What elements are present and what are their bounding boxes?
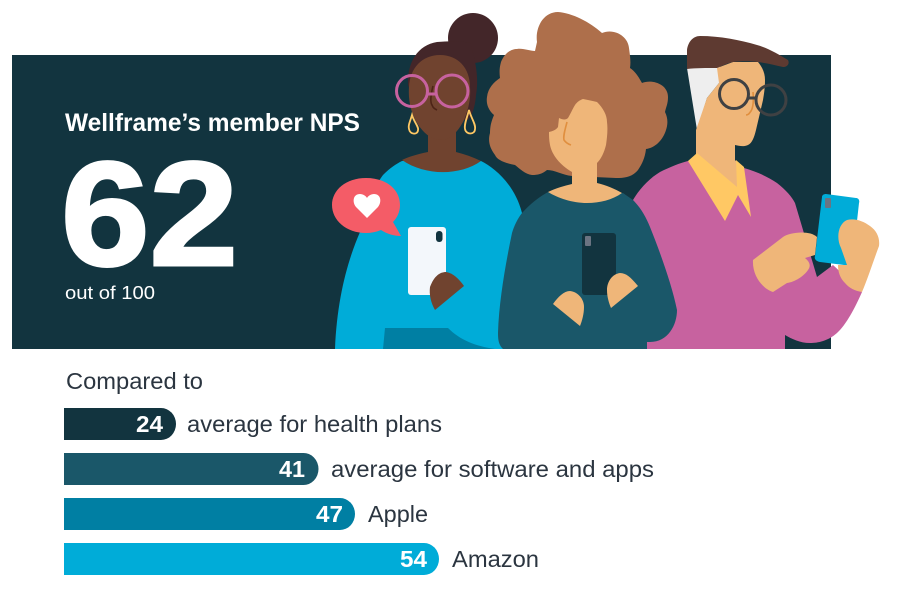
white hair bbox=[687, 66, 720, 130]
phone camera bbox=[825, 198, 831, 208]
phone camera bbox=[585, 236, 591, 246]
sweater shadow bbox=[383, 328, 495, 349]
panel: member NPS banner bbox=[12, 55, 831, 349]
face bbox=[409, 55, 470, 140]
teal sweater bbox=[498, 192, 677, 349]
white phone bbox=[408, 227, 446, 295]
hair bbox=[408, 41, 477, 120]
bar: Amazon 54: 54 bbox=[400, 546, 427, 572]
score: 62: 62 bbox=[61, 132, 238, 297]
bar: software and apps 41: 41 bbox=[279, 456, 305, 482]
face and neck bbox=[548, 99, 622, 203]
text: Compared to: Compared to bbox=[66, 368, 203, 394]
phone camera bbox=[436, 231, 442, 242]
pointing hand bbox=[753, 232, 817, 292]
hat hair bbox=[687, 36, 789, 69]
left hand bbox=[553, 291, 584, 326]
illustration: woman with curly hair and dark phone bbox=[487, 12, 677, 349]
bar: Apple 47 bbox=[64, 498, 428, 530]
heading: Wellframe's member NPS: Wellframe’s member NPS bbox=[65, 109, 360, 137]
dark phone bbox=[582, 233, 616, 295]
sweater bbox=[633, 161, 862, 349]
face and neck bbox=[696, 62, 765, 190]
curly hair bbox=[487, 12, 668, 178]
earrings bbox=[409, 110, 475, 134]
blue phone bbox=[815, 194, 859, 266]
hand bbox=[430, 272, 464, 310]
sweater bbox=[335, 161, 525, 349]
hair bun bbox=[448, 13, 498, 63]
right hand bbox=[607, 273, 638, 308]
nose bbox=[564, 122, 571, 145]
illustration: man with glasses and blue phone bbox=[633, 36, 879, 349]
bar: health plans 24: average for health plans bbox=[187, 411, 442, 437]
heart bbox=[354, 194, 380, 218]
text: out of 100: out of 100 bbox=[65, 283, 155, 303]
collar bbox=[688, 153, 751, 221]
glasses bbox=[396, 75, 468, 107]
nose bbox=[746, 92, 753, 115]
nose bbox=[431, 86, 437, 110]
neck and chest bbox=[402, 130, 481, 172]
bar: health plans 24: 24 bbox=[136, 411, 163, 437]
bar: software and apps 41: average for software and apps bbox=[331, 456, 654, 482]
bar: Apple 47: 47 bbox=[316, 501, 343, 527]
illustration: woman with bun and white phone bbox=[335, 13, 525, 349]
bar: Apple 47: Apple bbox=[368, 501, 428, 527]
bar: Amazon 54 bbox=[64, 543, 539, 575]
bar: health plans 24 bbox=[64, 408, 442, 440]
bar: Amazon 54: Amazon bbox=[452, 546, 539, 572]
holding hand bbox=[838, 219, 879, 292]
glasses bbox=[720, 80, 786, 115]
bar: software and apps 41 bbox=[64, 453, 654, 485]
icon: heart speech bubble bbox=[332, 178, 401, 236]
